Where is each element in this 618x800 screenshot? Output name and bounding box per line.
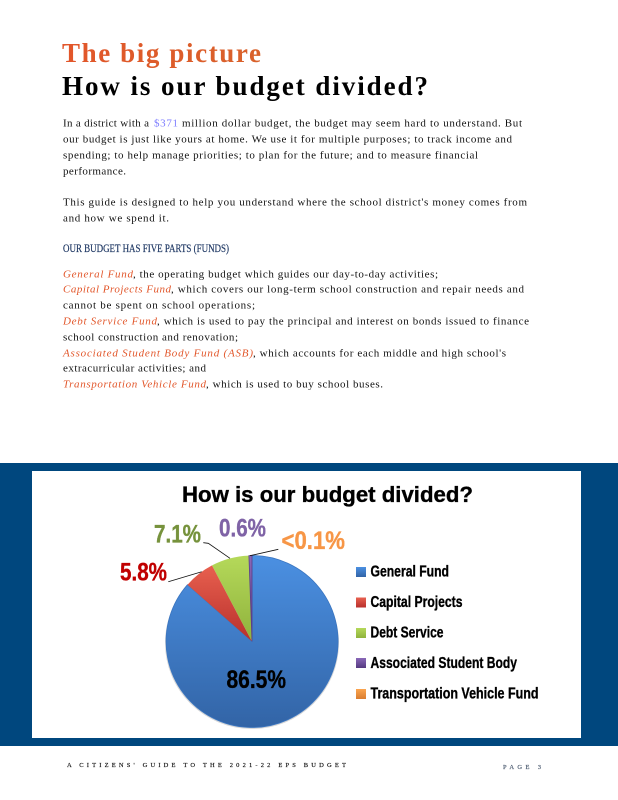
associated student body fund: , which accounts for each middle and high school's (253, 348, 506, 360)
chart title: How is our budget divided? (182, 482, 473, 507)
legend (356, 564, 538, 702)
footer: guide title: A CITIZENS' GUIDE TO THE 2021-22 EPS BUDGET (67, 762, 346, 769)
intro paragraph: our budget is just like yours at home. We use it for multiple purposes; to track income and (63, 134, 512, 146)
legend: general fund: General Fund (370, 564, 449, 580)
guide paragraph (63, 196, 527, 224)
capital projects fund: Capital Projects Fund (63, 284, 172, 296)
section title: The big picture: The big picture (62, 38, 261, 68)
intro paragraph: $371 (154, 118, 178, 130)
intro paragraph: performance. (63, 166, 126, 178)
fund list (62, 268, 529, 390)
debt service fund: , which is used to pay the principal and interest on bonds issued to finance (157, 316, 529, 328)
transportation vehicle fund: Transportation Vehicle Fund (63, 378, 206, 390)
debt service fund: Debt Service Fund (62, 316, 158, 328)
slice: general fund (166, 555, 338, 728)
value: less than 0.1%: <0.1% (282, 527, 345, 555)
footer: page number: PAGE 3 (503, 764, 541, 771)
legend: general fund (356, 564, 449, 580)
value: 86.5%: 86.5% (226, 666, 286, 694)
debt service fund (62, 316, 529, 344)
slice: debt service (212, 556, 252, 642)
legend: capital projects: Capital Projects (370, 594, 463, 611)
capital projects fund: , which covers our long-term school construction and repair needs and (171, 284, 524, 296)
legend: debt service (356, 624, 444, 642)
guide paragraph: and how we spend it. (63, 212, 169, 224)
capital projects fund (63, 284, 524, 312)
leader lines (168, 543, 278, 582)
intro paragraph: million dollar budget, the budget may seem hard to understand. But (182, 118, 522, 130)
associated student body fund: extracurricular activities; and (63, 362, 206, 374)
intro paragraph: In a district with a (63, 118, 149, 130)
associated student body fund (62, 348, 506, 374)
subheading: five parts: OUR BUDGET HAS FIVE PARTS (FUNDS) (63, 243, 229, 255)
slice: capital projects (188, 565, 252, 642)
guide paragraph: This guide is designed to help you understand where the school district's money comes from (63, 196, 527, 208)
chart panel (32, 471, 581, 738)
debt service fund: school construction and renovation; (63, 332, 238, 344)
legend: debt service: Debt Service (370, 624, 444, 642)
associated student body fund: Associated Student Body Fund (ASB) (62, 348, 253, 360)
general fund: General Fund (63, 268, 134, 280)
value: 7.1%: 7.1% (154, 520, 201, 548)
general fund: , the operating budget which guides our day-to-day activities; (133, 268, 438, 280)
main heading: How is our budget divided? (62, 71, 428, 101)
pie chart (165, 555, 339, 729)
intro paragraph (63, 118, 522, 178)
value: 0.6%: 0.6% (219, 514, 266, 542)
legend: associated student body: Associated Student Body (370, 655, 517, 672)
intro paragraph: spending; to help manage priorities; to plan for the future; and to measure financial (63, 150, 478, 162)
legend: transportation vehicle fund: Transportation Vehicle Fund (370, 686, 538, 702)
chart band (0, 463, 618, 746)
slice: associated student body (249, 556, 252, 642)
value: 5.8%: 5.8% (120, 558, 167, 586)
capital projects fund: cannot be spent on school operations; (63, 300, 255, 312)
transportation vehicle fund: , which is used to buy school buses. (206, 378, 383, 390)
legend: capital projects (356, 594, 463, 611)
transportation vehicle fund (63, 378, 383, 390)
